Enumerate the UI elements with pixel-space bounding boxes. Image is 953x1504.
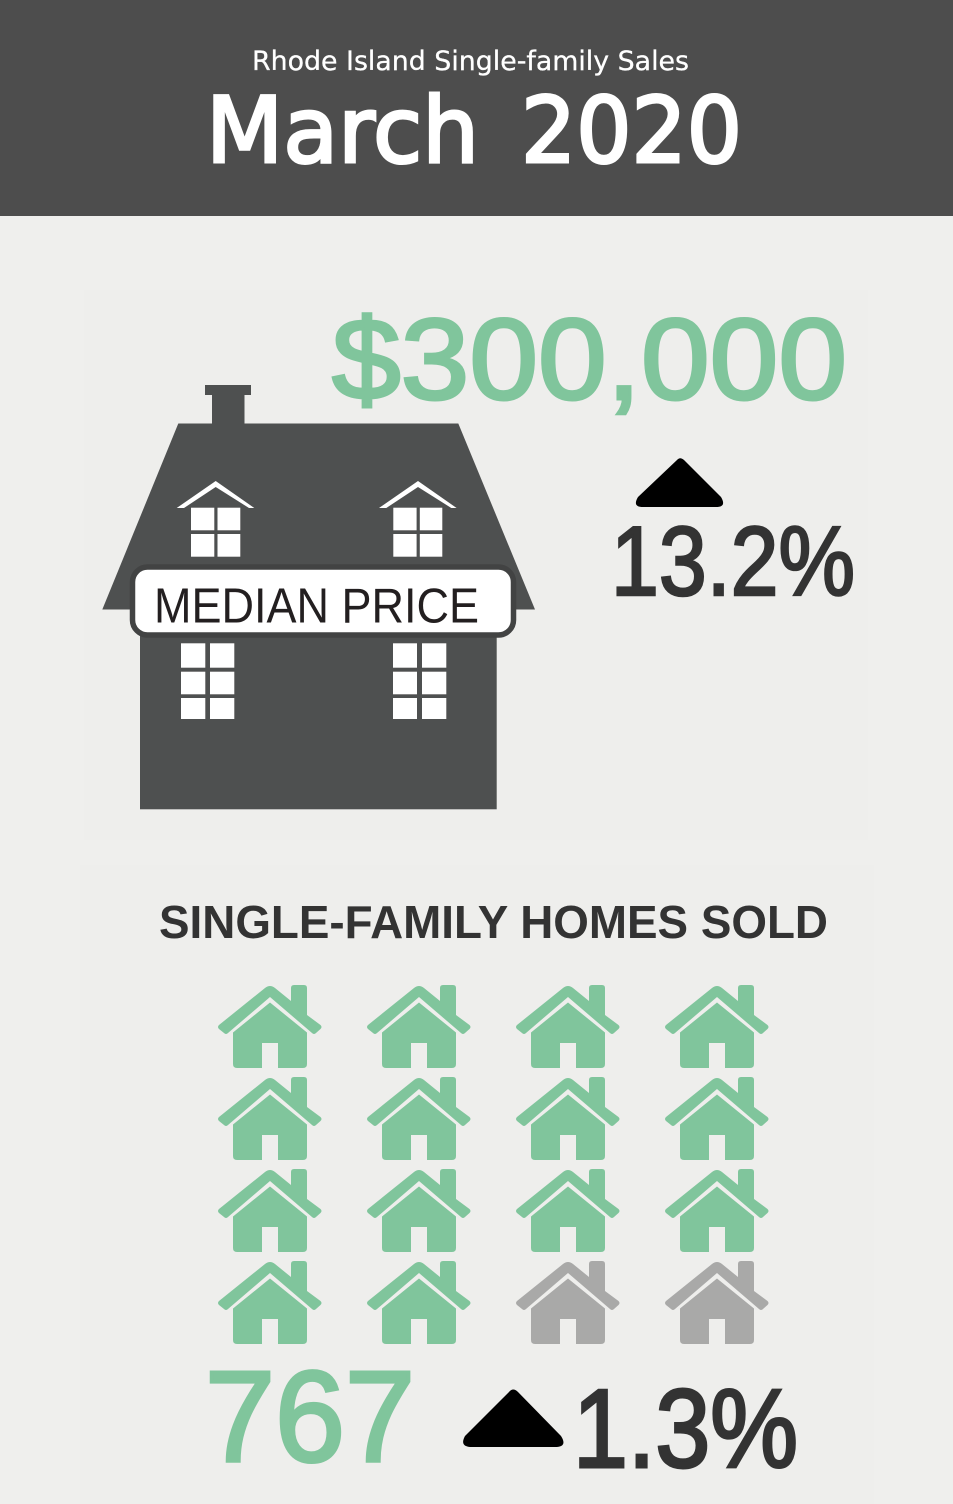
header banner [0,0,953,216]
icon: large house with median price label [102,385,535,809]
title: 2020 [521,79,742,184]
homes sold heading: SINGLE-FAMILY HOMES SOLD [159,896,828,948]
median price value: $300,000 [332,296,847,424]
title: March [206,79,479,184]
median price change: 13.2% [611,506,855,616]
icon: up arrow median price [636,458,723,507]
icon: up arrow homes sold [463,1390,563,1447]
lower windows [181,643,446,719]
pictogram: homes sold [218,985,768,1344]
homes sold value: 767 [205,1345,415,1489]
homes sold change: 1.3% [573,1367,798,1491]
title [206,79,742,184]
dormer windows [177,481,457,557]
median price label: MEDIAN PRICE [154,580,479,634]
subtitle: Rhode Island Single-family Sales [252,46,689,77]
